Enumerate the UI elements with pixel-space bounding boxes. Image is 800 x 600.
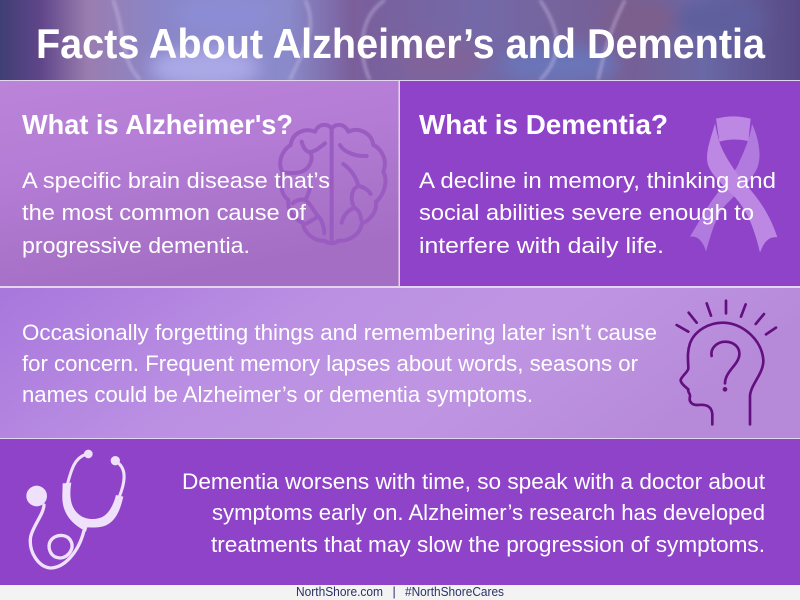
footer: #NorthShoreCares bbox=[405, 585, 504, 599]
body text: treatments that may slow the progression of symptoms. bbox=[211, 532, 765, 557]
icon: brain bbox=[280, 125, 385, 243]
divider lines bbox=[0, 80, 800, 288]
panel: memory lapses bbox=[0, 288, 800, 438]
divider line bbox=[0, 438, 800, 439]
panel: see a doctor bbox=[0, 439, 800, 585]
body text: for concern. Frequent memory lapses about words, seasons or bbox=[22, 351, 638, 376]
icon: head with question mark bbox=[677, 301, 776, 424]
body text: A decline in memory, thinking and bbox=[419, 168, 776, 193]
body text: Occasionally forgetting things and remembering later isn’t cause bbox=[22, 320, 657, 345]
title: Facts About Alzheimer’s and Dementia bbox=[36, 20, 766, 67]
body text bbox=[22, 320, 657, 407]
body text: A specific brain disease that’s bbox=[22, 168, 330, 193]
icon: awareness ribbon bbox=[690, 116, 777, 253]
body text: interfere with daily life. bbox=[419, 233, 664, 258]
body text bbox=[182, 469, 766, 557]
body text: progressive dementia. bbox=[22, 233, 250, 258]
footer: NorthShore.com bbox=[296, 585, 383, 599]
footer bbox=[0, 585, 800, 600]
header background bbox=[0, 0, 800, 88]
panel: what is Alzheimer's bbox=[0, 81, 398, 286]
body text bbox=[22, 168, 330, 258]
body text: Dementia worsens with time, so speak with a doctor about bbox=[182, 469, 766, 494]
body text: the most common cause of bbox=[22, 200, 307, 225]
heading: What is Dementia? bbox=[419, 109, 668, 140]
body text: names could be Alzheimer’s or dementia symptoms. bbox=[22, 382, 533, 407]
footer: | bbox=[392, 585, 396, 599]
body text bbox=[419, 168, 776, 258]
panel: what is dementia bbox=[400, 81, 800, 286]
body text: symptoms early on. Alzheimer’s research has developed bbox=[212, 500, 765, 525]
icon: stethoscope bbox=[26, 450, 124, 568]
heading: What is Alzheimer's? bbox=[22, 109, 293, 140]
body text: social abilities severe enough to bbox=[419, 200, 754, 225]
